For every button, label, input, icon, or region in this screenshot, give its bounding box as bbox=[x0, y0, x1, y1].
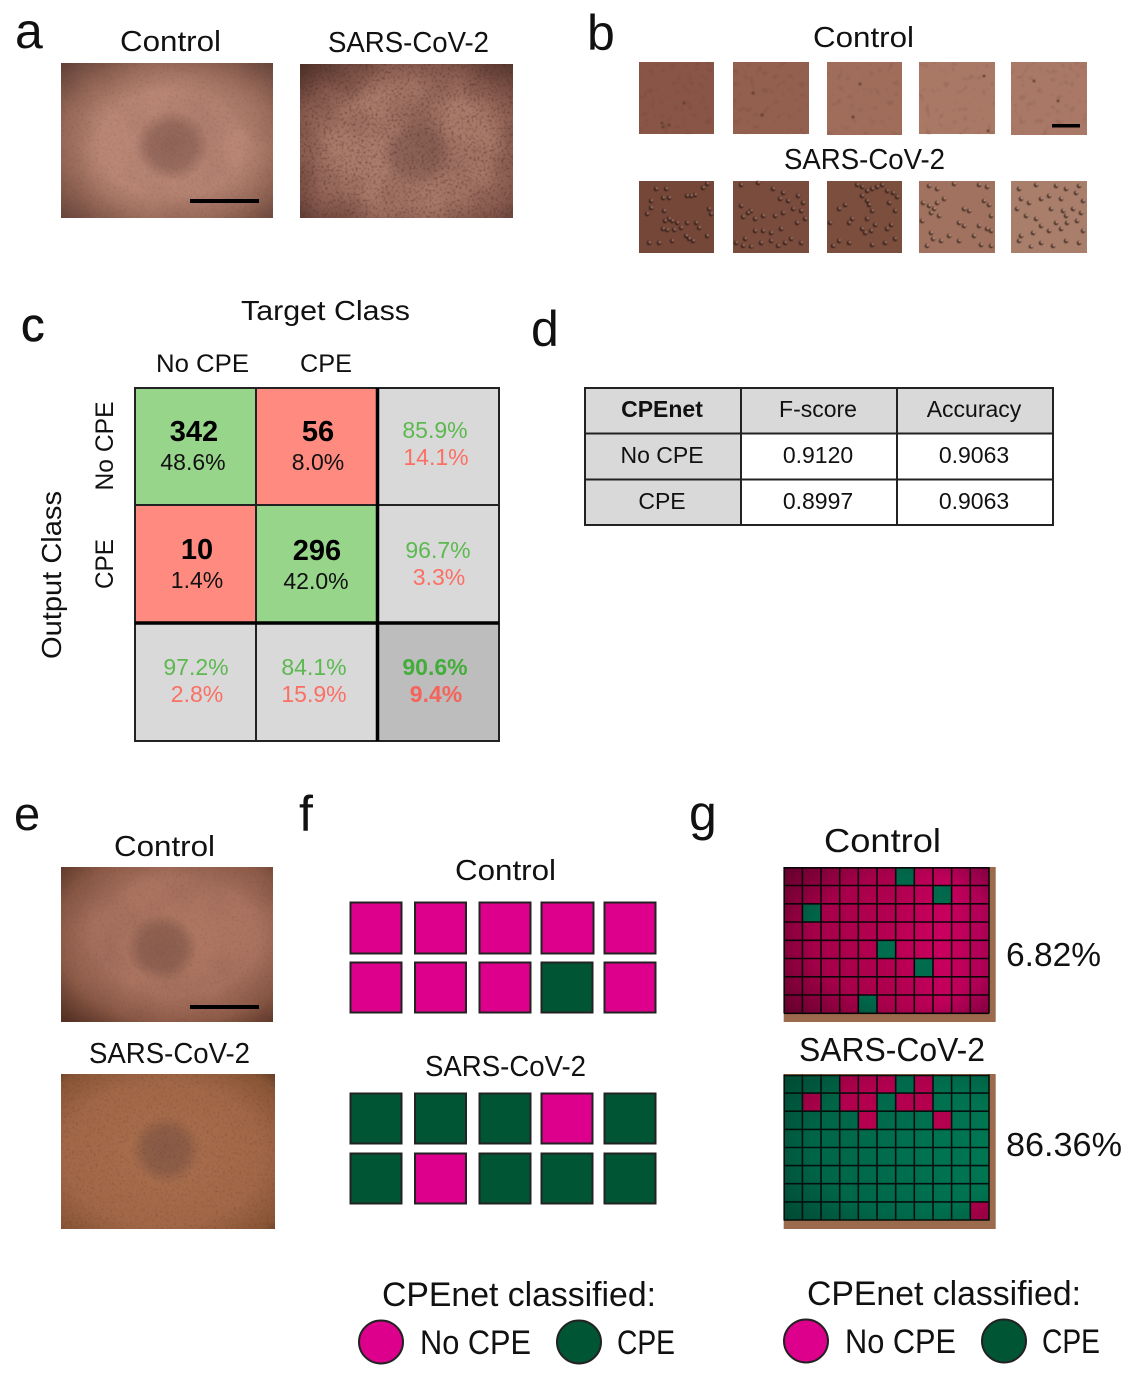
heading: Control: Control bbox=[455, 855, 556, 887]
table: 0.9120 bbox=[783, 442, 853, 468]
value: 6.82%: 6.82% bbox=[1006, 936, 1101, 973]
cell: row 1 totals: 85.9% bbox=[402, 417, 468, 443]
cell: 10 bbox=[171, 534, 223, 593]
panel b: image tiles bbox=[587, 5, 1087, 253]
legend: panel g bbox=[784, 1275, 1100, 1362]
panel d: metrics table bbox=[531, 301, 1053, 525]
panel letter c: c bbox=[21, 298, 44, 351]
cell: row 2 totals: 96.7% bbox=[405, 537, 471, 563]
heading: Control: Control bbox=[824, 822, 941, 859]
heading: SARS-CoV-2: SARS-CoV-2 bbox=[89, 1038, 250, 1070]
SARS-CoV-2 tiles bbox=[639, 181, 1087, 253]
heading: SARS-CoV-2: SARS-CoV-2 bbox=[425, 1051, 586, 1083]
column label: CPE: CPE bbox=[300, 350, 352, 378]
infected well overlay grid bbox=[784, 1074, 996, 1229]
cell: column 2 totals: 15.9% bbox=[281, 681, 347, 707]
legend title: CPEnet classified: bbox=[807, 1275, 1081, 1313]
cell: row 1 totals bbox=[402, 417, 469, 470]
value: 86.36%: 86.36% bbox=[1006, 1126, 1122, 1163]
cell: column 1 totals: 97.2% bbox=[163, 654, 229, 680]
row label: CPE: CPE bbox=[91, 539, 119, 589]
control well overlay grid bbox=[784, 867, 996, 1022]
scale bar bbox=[190, 199, 259, 203]
cell: 342: 342 bbox=[170, 416, 218, 448]
cell: row 2 totals bbox=[405, 537, 471, 590]
panel letter d: d bbox=[531, 301, 559, 357]
row label: No CPE: No CPE bbox=[91, 402, 119, 490]
scale bar bbox=[1052, 124, 1080, 128]
panel letter f: f bbox=[299, 786, 313, 842]
table bbox=[585, 388, 1053, 525]
panel c: confusion matrix bbox=[21, 295, 499, 741]
panel letter a: a bbox=[15, 3, 43, 59]
table: 0.9063 bbox=[939, 488, 1009, 514]
cell: 296 bbox=[283, 535, 349, 594]
heading: Target Class: Target Class bbox=[241, 295, 410, 326]
legend label: No CPE: No CPE bbox=[420, 1324, 531, 1362]
legend swatch: CPE bbox=[982, 1320, 1026, 1362]
legend label: No CPE: No CPE bbox=[845, 1323, 956, 1361]
table: Accuracy bbox=[927, 396, 1022, 422]
heading: Control: Control bbox=[813, 22, 914, 54]
column label: No CPE: No CPE bbox=[156, 350, 249, 378]
legend: panel f bbox=[359, 1276, 675, 1364]
cell: 342 bbox=[160, 416, 226, 475]
heading: SARS-CoV-2: SARS-CoV-2 bbox=[784, 144, 945, 176]
heading: Control: Control bbox=[114, 831, 215, 863]
legend swatch: No CPE bbox=[784, 1320, 828, 1362]
cell: row 1 totals: 14.1% bbox=[403, 444, 469, 470]
cell: column 2 totals bbox=[281, 654, 347, 707]
control tile grid bbox=[350, 902, 656, 1012]
table: CPEnet bbox=[621, 396, 703, 422]
scale bar bbox=[190, 1005, 259, 1009]
panel e: well images bbox=[14, 787, 275, 1229]
panel g: classified well overlays bbox=[689, 785, 1122, 1229]
micrograph: control well bbox=[61, 867, 273, 1022]
infected tile grid bbox=[350, 1094, 656, 1204]
table: No CPE bbox=[620, 442, 704, 468]
cell: 296: 42.0% bbox=[283, 568, 349, 594]
panel letter g: g bbox=[689, 785, 717, 841]
table: 0.9063 bbox=[939, 442, 1009, 468]
legend swatch: No CPE bbox=[359, 1320, 403, 1364]
cell: overall accuracy bbox=[402, 654, 468, 707]
cell: 56 bbox=[292, 416, 344, 475]
axis label: Output Class: Output Class bbox=[36, 491, 67, 659]
micrograph: infected well bbox=[61, 1074, 275, 1229]
panel a: control vs infected well images bbox=[15, 3, 513, 218]
cell: 56: 8.0% bbox=[292, 449, 344, 475]
legend title: CPEnet classified: bbox=[382, 1276, 656, 1314]
cell: overall accuracy: 90.6% bbox=[402, 654, 468, 680]
matrix cells bbox=[135, 388, 499, 741]
heading: Control: Control bbox=[120, 26, 221, 58]
cell: column 1 totals bbox=[163, 654, 229, 707]
cell: 10: 10 bbox=[181, 534, 213, 566]
control tiles bbox=[639, 60, 1087, 137]
panel letter b: b bbox=[587, 5, 615, 61]
cell: row 2 totals: 3.3% bbox=[413, 564, 465, 590]
legend label: CPE: CPE bbox=[617, 1324, 675, 1362]
cell: 296: 296 bbox=[293, 535, 341, 567]
cell: 56: 56 bbox=[302, 416, 334, 448]
panel f: example classification tiles bbox=[299, 786, 656, 1204]
table: F-score bbox=[779, 396, 857, 422]
cell: column 2 totals: 84.1% bbox=[281, 654, 347, 680]
cell: 342: 48.6% bbox=[160, 449, 226, 475]
cell: column 1 totals: 2.8% bbox=[171, 681, 223, 707]
table: CPE bbox=[638, 488, 686, 514]
micrograph: infected well bbox=[300, 64, 513, 218]
legend swatch: CPE bbox=[557, 1320, 601, 1364]
legend label: CPE: CPE bbox=[1042, 1323, 1100, 1361]
heading: SARS-CoV-2: SARS-CoV-2 bbox=[328, 27, 489, 59]
micrograph: control well bbox=[61, 63, 273, 218]
heading: SARS-CoV-2: SARS-CoV-2 bbox=[799, 1031, 985, 1068]
panel letter e: e bbox=[14, 787, 40, 840]
table: 0.8997 bbox=[783, 488, 853, 514]
cell: overall accuracy: 9.4% bbox=[410, 681, 462, 707]
cell: 10: 1.4% bbox=[171, 567, 223, 593]
